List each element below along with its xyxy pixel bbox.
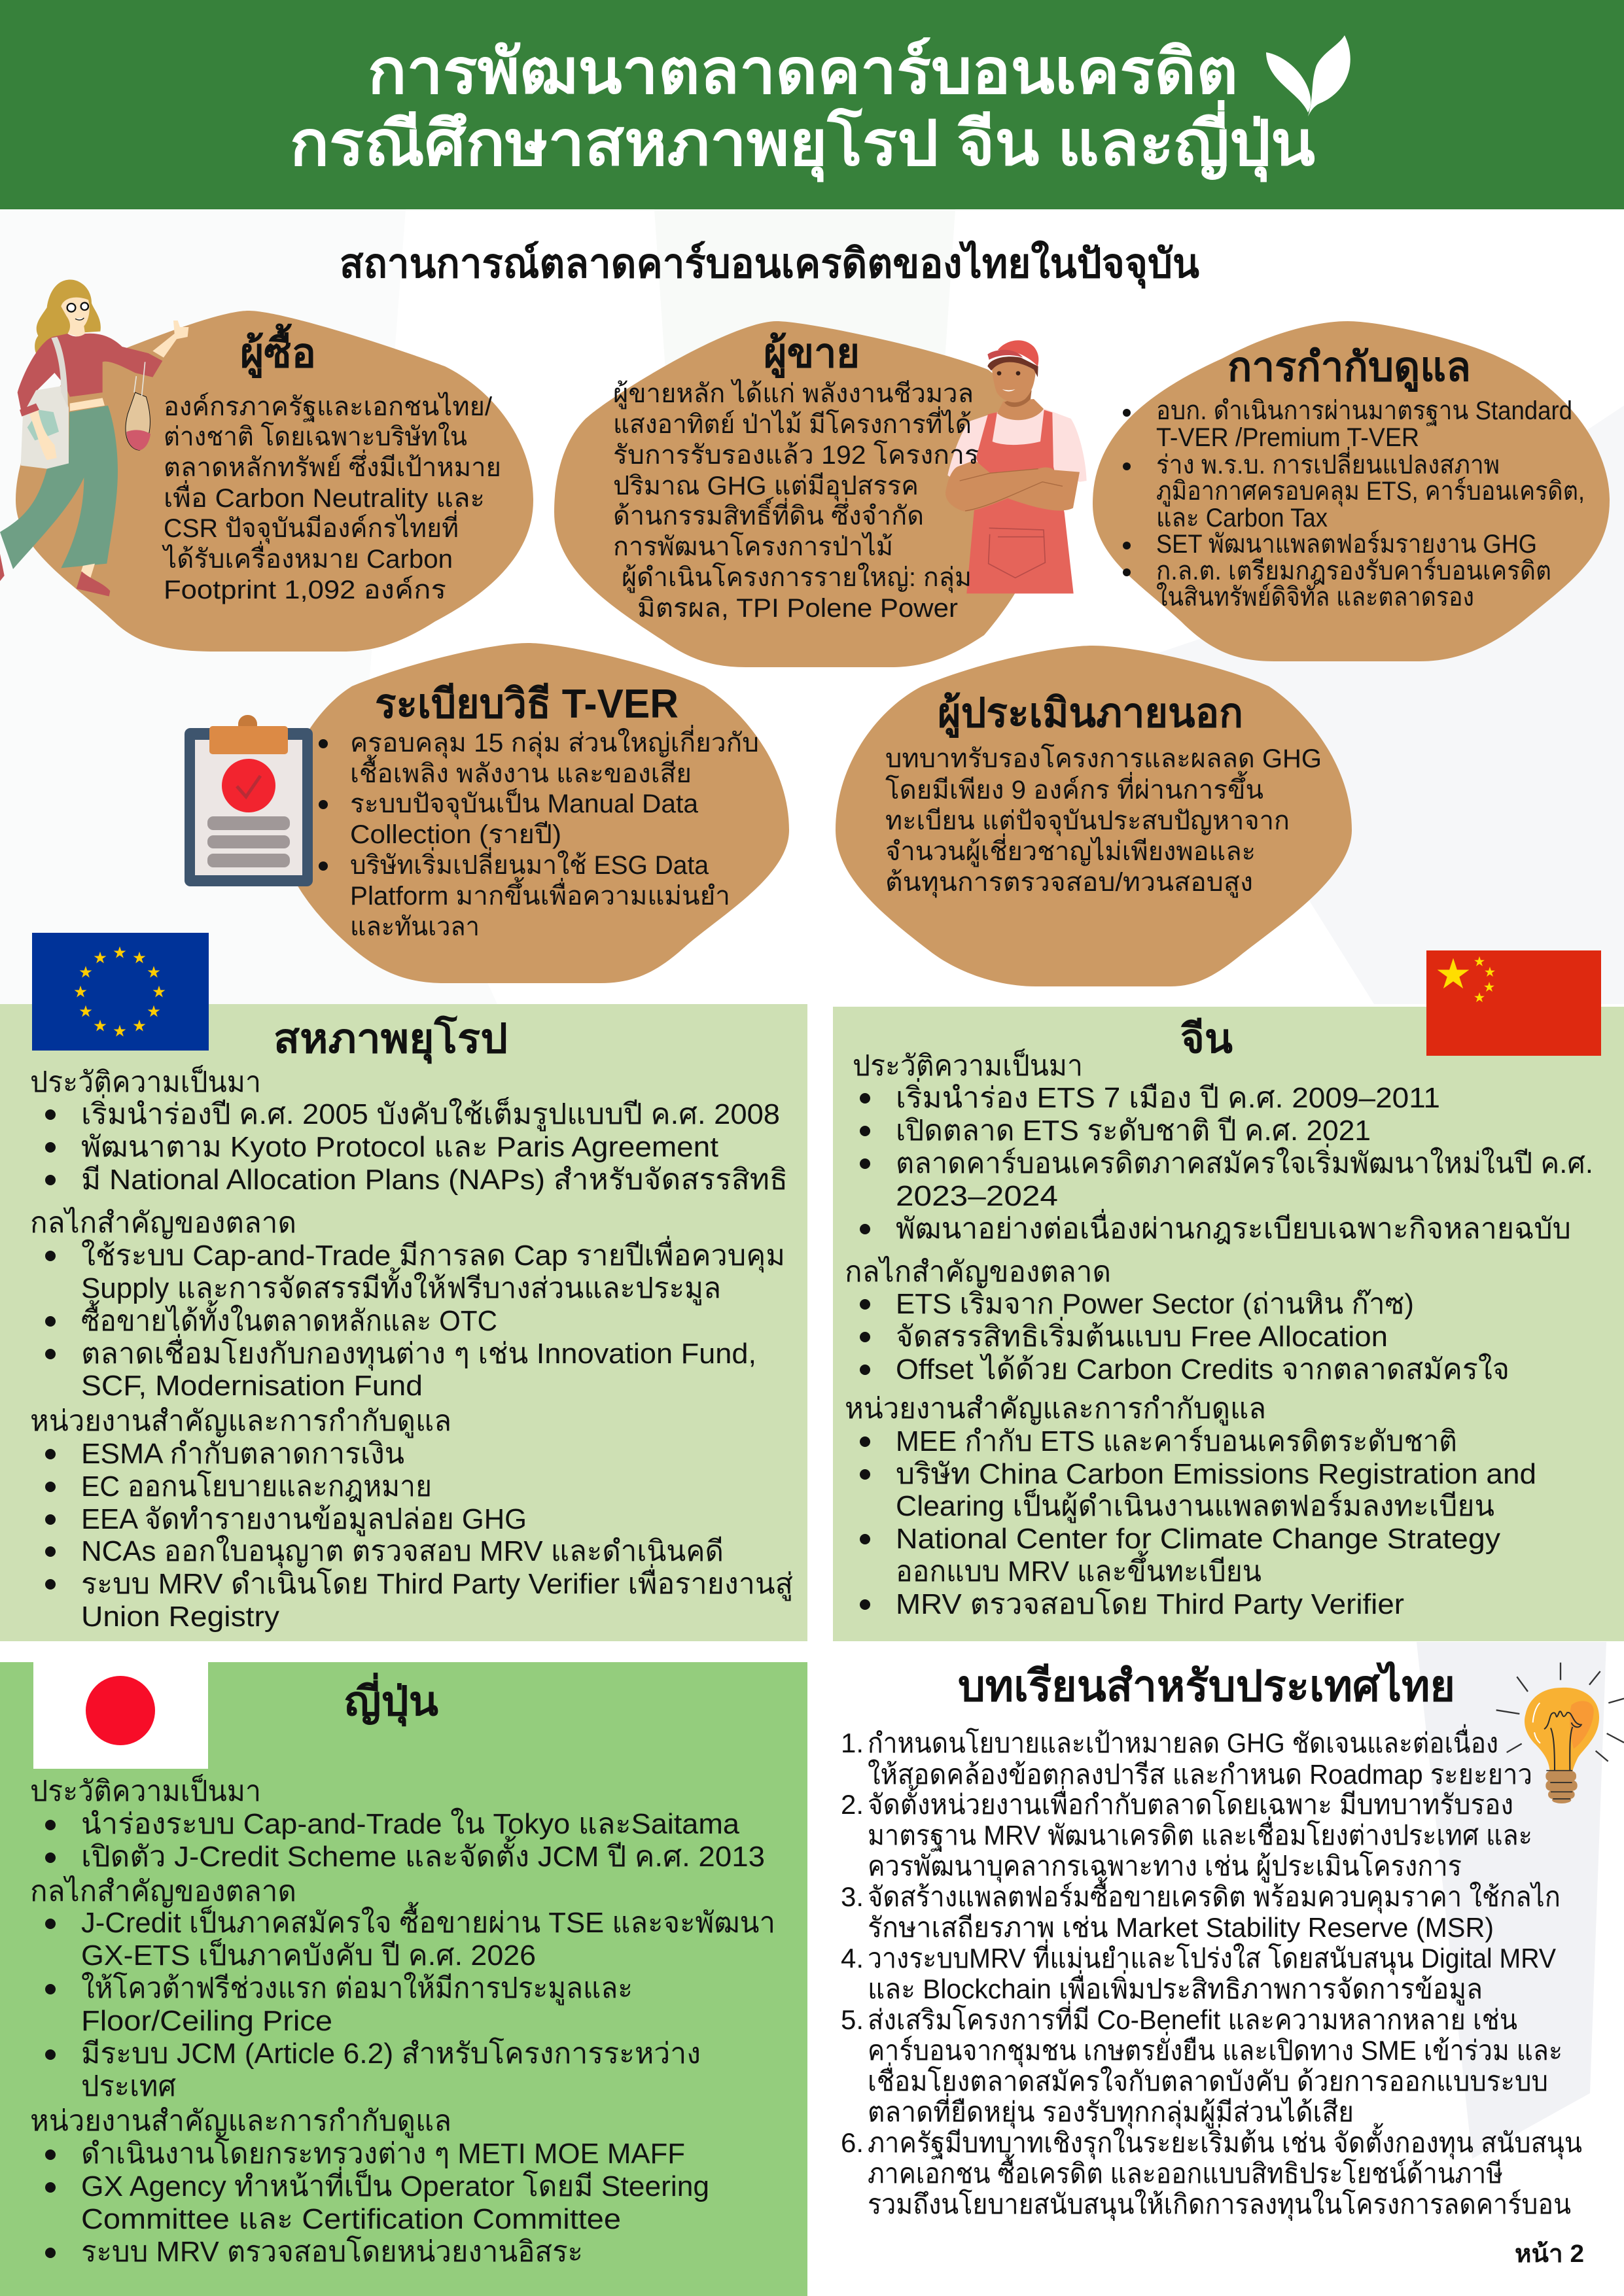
- text: assessor body: ต้นทุนการตรวจสอบ/ทวนสอบสูง: [885, 868, 1253, 898]
- text: lessons list: ควรพัฒนาบุคลากรเฉพาะทาง เช่น ผู้ประเมินโครงการ: [868, 1850, 1462, 1883]
- text: regulation bullets: ภูมิอากาศครอบคลุม ETS, คาร์บอนเครดิต,: [1156, 476, 1585, 507]
- icon: China flag: ★: [1474, 956, 1485, 968]
- text: EU mechanisms: ตลาดเชื่อมโยงกับกองทุนต่าง ๆ เช่น Innovation Fund,: [81, 1333, 756, 1371]
- text: seller body: ผู้ดำเนินโครงการรายใหญ่: กลุ่ม: [622, 562, 972, 593]
- text: EU agencies: EC ออกนโยบายและกฎหมาย: [81, 1470, 432, 1503]
- panel: European Union: [0, 933, 807, 1641]
- text: Japan mechanisms: ประเทศ: [81, 2070, 176, 2102]
- text: lessons list: วางระบบMRV ที่แม่นยำและโปร่งใส โดยสนับสนุน Digital MRV: [868, 1939, 1556, 1975]
- text: regulation bullets: ร่าง พ.ร.บ. การเปลี่ยนแปลงสภาพ: [1156, 447, 1500, 479]
- text: T-VER bullets: บริษัทเริ่มเปลี่ยนมาใช้ ESG Data: [350, 847, 709, 880]
- text: seller body: รับการรับรองแล้ว 192 โครงการ: [613, 440, 979, 470]
- heading: T-VER: ระเบียบวิธี T-VER: [375, 682, 679, 727]
- heading: China: จีน: [1180, 1017, 1233, 1062]
- icon: EU flag: ★: [79, 1005, 92, 1019]
- section heading: Thai situation: สถานการณ์ตลาดคาร์บอนเครดิตของไทยในปัจจุบัน: [340, 240, 1199, 288]
- text: Japan mechanisms: GX-ETS เป็นภาคบังคับ ปี ค.ศ. 2026: [81, 1938, 536, 1972]
- icon: EU flag: ★: [79, 965, 92, 980]
- panel: lessons for Thailand: [841, 1661, 1584, 2268]
- panel: China: [833, 950, 1624, 1641]
- icon: EU flag: ★: [152, 985, 166, 1000]
- icon: China flag: [1426, 950, 1601, 1056]
- text: buyer body: ต่างชาติ โดยเฉพาะบริษัทใน: [164, 421, 467, 451]
- text: EU agencies: Union Registry: [81, 1601, 279, 1633]
- text: regulation bullets: และ Carbon Tax: [1156, 504, 1328, 532]
- text: lessons list: ตลาดที่ยืดหยุ่น รองรับทุกกลุ่มผู้มีส่วนได้เสีย: [868, 2093, 1354, 2129]
- icon: China flag: ★: [1484, 966, 1496, 979]
- icon: EU flag: ★: [133, 951, 146, 965]
- text: buyer body: ตลาดหลักทรัพย์ ซึ่งมีเป้าหมาย: [164, 449, 501, 482]
- icon: EU flag: ★: [113, 1024, 126, 1039]
- text: T-VER bullets: ระบบปัจจุบันเป็น Manual Data: [350, 788, 699, 820]
- text: buyer body: Footprint 1,092 องค์กร: [164, 575, 446, 604]
- text: Japan agencies: [30, 2105, 709, 2268]
- text: lessons list: 3.: [841, 1881, 864, 1912]
- heading: seller: ผู้ขาย: [764, 331, 860, 378]
- text: T-VER bullets: Platform มากขึ้นเพื่อความแม่นยำ: [350, 877, 730, 911]
- text: EU agencies: [30, 1405, 793, 1633]
- text: seller body: [613, 379, 979, 623]
- icon: EU flag: ★: [113, 946, 126, 960]
- text: EU mechanisms: [30, 1206, 785, 1402]
- text: lessons list: 1.: [841, 1728, 864, 1758]
- icon: light bulb: [1496, 1663, 1624, 1803]
- text: lessons list: รักษาเสถียรภาพ เช่น Market Stability Reserve (MSR): [868, 1912, 1494, 1943]
- text: lessons list: และ Blockchain เพื่อเพิ่มประสิทธิภาพการจัดการข้อมูล: [868, 1970, 1483, 2006]
- text: Japan history: เปิดตัว J-Credit Scheme และจัดตั้ง JCM ปี ค.ศ. 2013: [81, 1835, 765, 1873]
- icon: China flag: ★: [1474, 992, 1485, 1004]
- header banner: [0, 0, 1624, 209]
- text: EU history: พัฒนาตาม Kyoto Protocol และ Paris Agreement: [81, 1131, 718, 1163]
- text: EU agencies: NCAs ออกใบอนุญาต ตรวจสอบ MRV และดำเนินคดี: [81, 1535, 724, 1569]
- heading: buyer: ผู้ซื้อ: [240, 323, 316, 378]
- heading: regulation: การกำกับดูแล: [1227, 345, 1471, 392]
- main title: การพัฒนาตลาดคาร์บอนเครดิต: [368, 37, 1238, 107]
- text: seller body: ด้านกรรมสิทธิ์ที่ดิน ซึ่งจำกัด: [613, 496, 924, 531]
- text: lessons list: กำหนดนโยบายและเป้าหมายลด GHG ชัดเจนและต่อเนื่อง: [868, 1724, 1498, 1758]
- heading: Japan: ญี่ปุ่น: [344, 1673, 438, 1726]
- text: T-VER bullets: ครอบคลุม 15 กลุ่ม ส่วนใหญ่เกี่ยวกับ: [350, 725, 759, 759]
- text: China agencies: บริษัท China Carbon Emissions Registration and: [896, 1458, 1536, 1490]
- text: EU mechanisms: ใช้ระบบ Cap-and-Trade มีการลด Cap รายปีเพื่อควบคุม: [81, 1235, 785, 1273]
- text: EU mechanisms: กลไกสำคัญของตลาด: [30, 1206, 296, 1239]
- text: regulation bullets: อบก. ดำเนินการผ่านมาตรฐาน Standard: [1156, 396, 1572, 426]
- text: lessons list: [841, 1724, 1582, 2221]
- text: lessons list: ภาคเอกชน ซื้อเครดิต และออกแบบสิทธิประโยชน์ด้านภาษี: [868, 2153, 1503, 2189]
- text: China agencies: [845, 1393, 1536, 1620]
- text: China agencies: MEE กำกับ ETS และคาร์บอนเครดิตระดับชาติ: [896, 1425, 1457, 1457]
- text: lessons list: 2.: [841, 1789, 864, 1820]
- icon: EU flag: [32, 933, 209, 1051]
- text: China history: 2023–2024: [896, 1180, 1058, 1212]
- panel: Japan: [0, 1652, 807, 2296]
- text: assessor body: ทะเบียน แต่ปัจจุบันประสบปัญหาจาก: [885, 807, 1290, 837]
- icon: EU flag: ★: [94, 1019, 107, 1034]
- text: T-VER bullets: Collection (รายปี): [350, 820, 561, 849]
- text: Japan agencies: Committee และ Certification Committee: [81, 2203, 621, 2235]
- text: T-VER bullets: [319, 725, 759, 941]
- text: assessor body: จำนวนผู้เชี่ยวชาญไม่เพียงพอและ: [885, 833, 1256, 867]
- panel: buyer: [16, 311, 533, 652]
- icon: EU flag: ★: [133, 1019, 146, 1034]
- text: assessor body: บทบาทรับรองโครงการและผลลด GHG: [885, 744, 1322, 773]
- text: China history: เปิดตลาด ETS ระดับชาติ ปี ค.ศ. 2021: [896, 1115, 1371, 1147]
- icon: leaves: [1266, 35, 1350, 116]
- text: China mechanisms: Offset ได้ด้วย Carbon Credits จากตลาดสมัครใจ: [896, 1353, 1509, 1385]
- text: lessons list: รวมถึงนโยบายสนับสนุนให้เกิดการลงทุนในโครงการลดคาร์บอน: [868, 2188, 1571, 2221]
- text: EU history: เริ่มนำร่องปี ค.ศ. 2005 บังคับใช้เต็มรูปแบบปี ค.ศ. 2008: [81, 1094, 780, 1132]
- icon: EU flag: ★: [147, 1005, 160, 1019]
- icon: woman with bags: [0, 279, 188, 597]
- text: lessons list: ส่งเสริมโครงการที่มี Co-Benefit และความหลากหลาย เช่น: [868, 2001, 1517, 2035]
- panel: regulation: [1093, 321, 1610, 661]
- text: lessons list: ให้สอดคล้องข้อตกลงปารีส และกำหนด Roadmap ระยะยาว: [868, 1759, 1532, 1790]
- text: Japan mechanisms: ให้โควต้าฟรีช่วงแรก ต่อมาให้มีการประมูลและ: [81, 1972, 633, 2006]
- text: Japan mechanisms: Floor/Ceiling Price: [81, 2005, 332, 2037]
- text: T-VER bullets: และทันเวลา: [350, 913, 480, 941]
- text: Japan mechanisms: กลไกสำคัญของตลาด: [30, 1875, 296, 1907]
- text: seller body: มิตรผล, TPI Polene Power: [637, 594, 958, 623]
- icon: clipboard: [185, 715, 313, 886]
- text: China agencies: หน่วยงานสำคัญและการกำกับดูแล: [845, 1393, 1266, 1426]
- text: Japan agencies: หน่วยงานสำคัญและการกำกับดูแล: [30, 2105, 451, 2138]
- text: Japan agencies: ดำเนินงานโดยกระทรวงต่าง ๆ METI MOE MAFF: [81, 2137, 685, 2170]
- text: China history: ตลาดคาร์บอนเครดิตภาคสมัครใจเริ่มพัฒนาใหม่ในปี ค.ศ.: [896, 1143, 1593, 1179]
- text: China history: [853, 1049, 1593, 1245]
- panel: external assessor: [836, 646, 1352, 986]
- text: EU history: ประวัติความเป็นมา: [30, 1065, 261, 1098]
- panel: seller: [554, 321, 1040, 667]
- text: Japan mechanisms: J-Credit เป็นภาคสมัครใจ ซื้อขายผ่าน TSE และจะพัฒนา: [81, 1902, 775, 1939]
- text: regulation bullets: SET พัฒนาแพลตฟอร์มรายงาน GHG: [1156, 529, 1537, 559]
- text: EU mechanisms: SCF, Modernisation Fund: [81, 1370, 423, 1402]
- text: regulation bullets: ในสินทรัพย์ดิจิทัล และตลาดรอง: [1156, 582, 1474, 612]
- text: China mechanisms: [845, 1255, 1509, 1385]
- page number: หน้า 2: [1515, 2240, 1584, 2268]
- text: regulation bullets: T-VER /Premium T-VER: [1156, 423, 1419, 452]
- text: buyer body: CSR ปัจจุบันมีองค์กรไทยที่: [164, 510, 459, 544]
- heading: assessor: ผู้ประเมินภายนอก: [938, 691, 1243, 738]
- text: lessons list: จัดสร้างแพลตฟอร์มซื้อขายเครดิต พร้อมควบคุมราคา ใช้กลไก: [868, 1877, 1561, 1914]
- text: Japan agencies: ระบบ MRV ตรวจสอบโดยหน่วยงานอิสระ: [81, 2235, 583, 2268]
- text: regulation bullets: ก.ล.ต. เตรียมกฎรองรับคาร์บอนเครดิต: [1156, 556, 1551, 585]
- icon: man in apron: [945, 340, 1087, 593]
- text: regulation bullets: [1123, 396, 1585, 612]
- text: Japan history: ประวัติความเป็นมา: [30, 1774, 261, 1807]
- text: seller body: แสงอาทิตย์ ป่าไม้ มีโครงการที่ได้: [613, 406, 972, 439]
- text: assessor body: [885, 744, 1322, 898]
- text: lessons list: มาตรฐาน MRV พัฒนาเครดิต และเชื่อมโยงต่างประเทศ และ: [868, 1817, 1532, 1852]
- text: buyer body: เพื่อ Carbon Neutrality และ: [164, 480, 485, 513]
- text: lessons list: จัดตั้งหน่วยงานเพื่อกำกับตลาดโดยเฉพาะ มีบทบาทรับรอง: [868, 1784, 1513, 1820]
- text: China agencies: National Center for Climate Change Strategy: [896, 1523, 1500, 1555]
- text: T-VER bullets: เชื้อเพลิง พลังงาน และของเสีย: [350, 754, 692, 788]
- text: lessons list: เชื่อมโยงตลาดสมัครใจกับตลาดบังคับ ด้วยการออกแบบระบบ: [868, 2062, 1548, 2096]
- text: Japan mechanisms: [30, 1875, 775, 2102]
- icon: China flag: ★: [1484, 981, 1494, 994]
- main title: กรณีศึกษาสหภาพยุโรป จีน และญี่ปุ่น: [290, 99, 1315, 182]
- text: Japan mechanisms: มีระบบ JCM (Article 6.2) สำหรับโครงการระหว่าง: [81, 2037, 701, 2070]
- text: China history: ประวัติความเป็นมา: [853, 1049, 1083, 1082]
- text: lessons list: คาร์บอนจากชุมชน เกษตรยั่งยืน และเปิดทาง SME เข้าร่วม และ: [868, 2032, 1562, 2068]
- text: EU agencies: ESMA กำกับตลาดการเงิน: [81, 1438, 404, 1470]
- text: buyer body: องค์กรภาครัฐและเอกชนไทย/: [164, 392, 493, 423]
- text: China agencies: ออกแบบ MRV และขึ้นทะเบียน: [896, 1550, 1262, 1588]
- text: China agencies: Clearing เป็นผู้ดำเนินงานแพลตฟอร์มลงทะเบียน: [896, 1489, 1494, 1523]
- text: buyer body: [162, 392, 501, 604]
- text: Japan agencies: GX Agency ทำหน้าที่เป็น Operator โดยมี Steering: [81, 2166, 709, 2202]
- icon: China flag: ★: [1436, 956, 1470, 994]
- icon: Japan flag: [33, 1652, 208, 1769]
- panel: T-VER method: [279, 643, 789, 983]
- text: China agencies: MRV ตรวจสอบโดย Third Party Verifier: [896, 1588, 1404, 1620]
- heading: lessons: บทเรียนสำหรับประเทศไทย: [958, 1661, 1455, 1710]
- text: EU mechanisms: ซื้อขายได้ทั้งในตลาดหลักและ OTC: [81, 1300, 497, 1337]
- text: seller body: ผู้ขายหลัก ได้แก่ พลังงานชีวมวล: [613, 379, 974, 409]
- text: Japan history: [30, 1774, 765, 1873]
- text: Japan history: นำร่องระบบ Cap-and-Trade ใน Tokyo และSaitama: [81, 1807, 740, 1840]
- text: EU agencies: หน่วยงานสำคัญและการกำกับดูแล: [30, 1405, 451, 1438]
- text: China mechanisms: กลไกสำคัญของตลาด: [845, 1255, 1111, 1288]
- text: EU history: [30, 1065, 788, 1196]
- icon: EU flag: ★: [94, 951, 107, 965]
- text: EU agencies: ระบบ MRV ดำเนินโดย Third Party Verifier เพื่อรายงานสู่: [81, 1563, 793, 1601]
- text: seller body: ปริมาณ GHG แต่มีอุปสรรค: [613, 472, 919, 502]
- icon: EU flag: ★: [74, 985, 87, 1000]
- text: China mechanisms: จัดสรรสิทธิเริ่มต้นแบบ Free Allocation: [896, 1316, 1388, 1353]
- text: buyer body: ได้รับเครื่องหมาย Carbon: [162, 541, 453, 574]
- text: EU history: มี National Allocation Plans (NAPs) สำหรับจัดสรรสิทธิ: [81, 1164, 788, 1196]
- text: China history: เริ่มนำร่อง ETS 7 เมือง ปี ค.ศ. 2009–2011: [896, 1077, 1440, 1114]
- heading: EU: สหภาพยุโรป: [274, 1015, 508, 1064]
- text: assessor body: โดยมีเพียง 9 องค์กร ที่ผ่านการขึ้น: [885, 771, 1263, 805]
- text: EU agencies: EEA จัดทำรายงานข้อมูลปล่อย GHG: [81, 1503, 527, 1537]
- text: EU mechanisms: Supply และการจัดสรรมีทั้งให้ฟรีบางส่วนและประมูล: [81, 1267, 721, 1306]
- text: lessons list: ภาครัฐมีบทบาทเชิงรุกในระยะเริ่มต้น เช่น จัดตั้งกองทุน สนับสนุน: [868, 2123, 1582, 2160]
- text: seller body: การพัฒนาโครงการป่าไม้: [613, 532, 893, 561]
- icon: EU flag: ★: [147, 965, 160, 980]
- text: lessons list: 6.: [841, 2127, 864, 2158]
- text: lessons list: 5.: [841, 2004, 864, 2035]
- text: lessons list: 4.: [841, 1943, 864, 1974]
- text: China mechanisms: ETS เริ่มจาก Power Sector (ถ่านหิน ก๊าซ): [896, 1283, 1414, 1320]
- main title: [290, 37, 1315, 182]
- text: China history: พัฒนาอย่างต่อเนื่องผ่านกฎระเบียบเฉพาะกิจหลายฉบับ: [896, 1208, 1571, 1245]
